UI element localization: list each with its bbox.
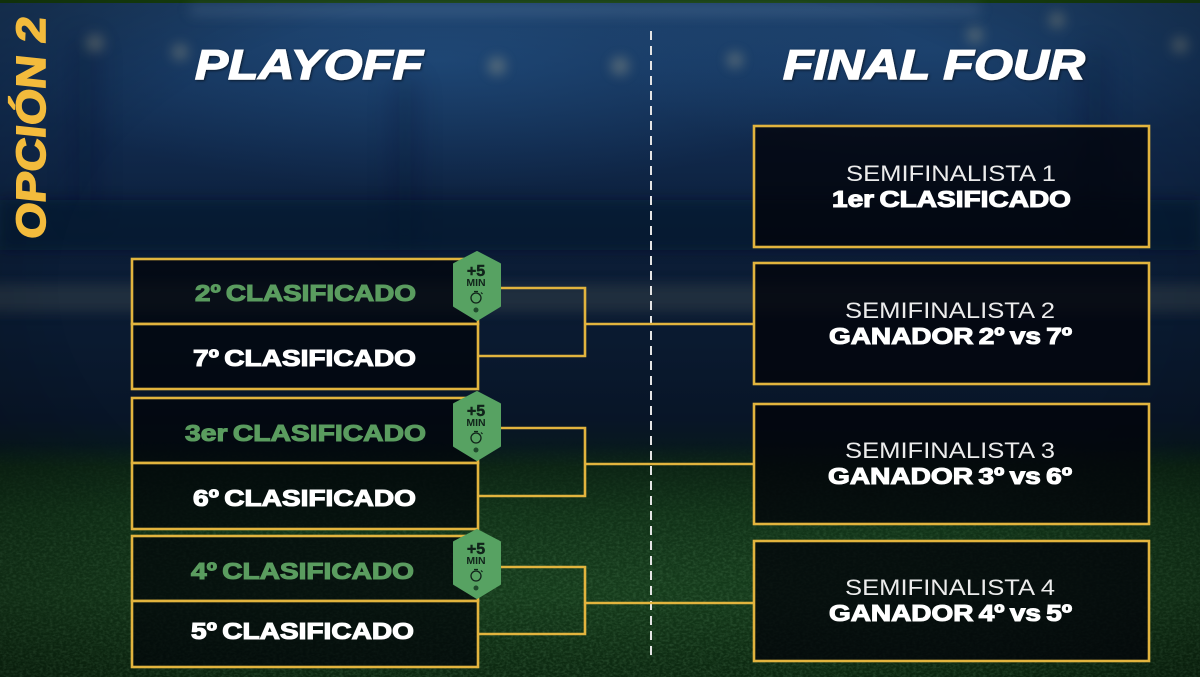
- bracket connectors: [478, 288, 754, 634]
- icon: +5 min badge 2: +5: [467, 403, 485, 420]
- icon: +5 min badge 1: MIN: [466, 277, 486, 289]
- playoff team labels: 3er CLASIFICADO: [185, 420, 426, 446]
- panel: semifinalista 1: 1er CLASIFICADO: [832, 186, 1071, 212]
- icon: +5 min badge 2: [454, 392, 500, 460]
- panel: semifinalista 3: SEMIFINALISTA 3: [845, 438, 1055, 463]
- panel: semifinalista 4: SEMIFINALISTA 4: [845, 575, 1055, 600]
- icon: +5 min badge 1: [454, 252, 500, 320]
- playoff team labels: [185, 280, 426, 644]
- playoff team labels: 6º CLASIFICADO: [193, 485, 416, 511]
- vertical label: opción 2: OPCIÓN 2: [8, 14, 54, 241]
- panel: semifinalista 2: SEMIFINALISTA 2: [845, 298, 1055, 323]
- heading: final four: FINAL FOUR: [783, 41, 1086, 88]
- panel: semifinalista 3: GANADOR 3º vs 6º: [828, 463, 1072, 489]
- panel: semifinalista 2: [754, 263, 1149, 384]
- playoff team labels: 5º CLASIFICADO: [191, 618, 414, 644]
- panel: semifinalista 4: [754, 541, 1149, 661]
- icon: +5 min badge 1: +5: [467, 263, 485, 280]
- icon: +5 min badge 3: [454, 530, 500, 598]
- playoff team labels: 2º CLASIFICADO: [195, 280, 416, 306]
- icon: +5 min badge 3: MIN: [466, 555, 486, 567]
- panel: semifinalista 1: [754, 126, 1149, 247]
- heading: playoff: PLAYOFF: [195, 41, 425, 88]
- panel: semifinalista 3: [754, 404, 1149, 524]
- panel: semifinalista 2: GANADOR 2º vs 7º: [829, 323, 1072, 349]
- playoff team labels: 7º CLASIFICADO: [193, 345, 416, 371]
- panel: playoff teams: [132, 259, 478, 667]
- panel: semifinalista 1: SEMIFINALISTA 1: [846, 161, 1056, 186]
- panel: semifinalista 4: GANADOR 4º vs 5º: [829, 600, 1072, 626]
- divider: dashed line: [650, 31, 652, 660]
- icon: +5 min badge 2: MIN: [466, 417, 486, 429]
- icon: +5 min badge 3: +5: [467, 541, 485, 558]
- playoff team labels: 4º CLASIFICADO: [191, 558, 414, 584]
